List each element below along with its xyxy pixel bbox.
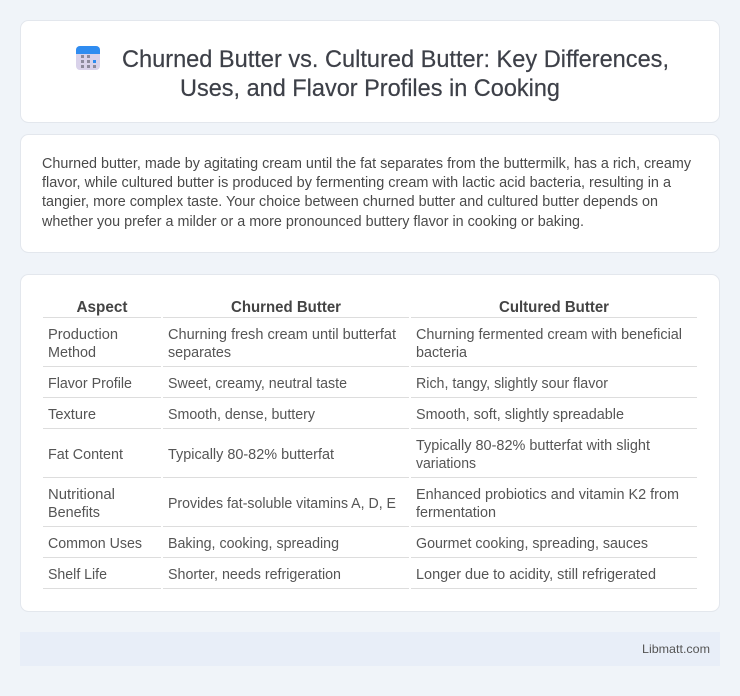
text block: introduction: [41, 156, 692, 230]
title: [122, 46, 669, 102]
row: common uses: Common Uses: [48, 536, 142, 552]
row: nutritional benefits: [48, 487, 679, 521]
row: flavor profile: Rich, tangy, slightly sour flavor: [416, 376, 608, 392]
panel: title header: [20, 20, 720, 122]
row: fat content: Typically 80-82% butterfat with slight: [416, 438, 650, 454]
row: texture: [48, 407, 624, 423]
row: nutritional benefits: Nutritional: [48, 487, 115, 503]
title: Uses, and Flavor Profiles in Cooking: [180, 75, 560, 102]
text block: introduction: tangier, more complex taste. Your choice between churned butter and cultured butter depends on: [42, 194, 658, 210]
table header: [76, 299, 609, 316]
footer: [20, 632, 720, 666]
row: fat content: Fat Content: [48, 447, 123, 463]
row: common uses: Gourmet cooking, spreading, sauces: [416, 536, 648, 552]
row: production method: [48, 327, 682, 361]
row: texture: Smooth, dense, buttery: [168, 407, 316, 423]
row: texture: Smooth, soft, slightly spreadable: [416, 407, 624, 423]
row: fat content: variations: [416, 456, 476, 472]
row: fat content: [48, 438, 650, 472]
row: production method: Method: [48, 345, 96, 361]
row: flavor profile: Flavor Profile: [48, 376, 132, 392]
row: production method: separates: [168, 345, 231, 361]
text block: introduction: flavor, while cultured butter is produced by fermenting cream with lactic acid bacteria, resulting in a: [42, 175, 671, 191]
table header: Churned Butter: [231, 299, 341, 316]
row: fat content: Typically 80-82% butterfat: [168, 447, 334, 463]
row: common uses: Baking, cooking, spreading: [168, 536, 339, 552]
row: shelf life: Shorter, needs refrigeration: [168, 567, 341, 583]
row: shelf life: Longer due to acidity, still refrigerated: [416, 567, 656, 583]
row: texture: Texture: [48, 407, 96, 423]
row: nutritional benefits: fermentation: [416, 505, 496, 521]
panel: introduction: [20, 134, 720, 252]
table header: Cultured Butter: [499, 299, 609, 316]
row: nutritional benefits: Provides fat-soluble vitamins A, D, E: [168, 496, 396, 512]
row: flavor profile: [48, 376, 608, 392]
row: common uses: [48, 536, 648, 552]
panel: comparison table: [20, 274, 720, 612]
row: production method: Churning fermented cream with beneficial: [416, 327, 682, 343]
row: production method: bacteria: [416, 345, 467, 361]
row: shelf life: Shelf Life: [48, 567, 107, 583]
row: shelf life: [48, 567, 656, 583]
footer: Libmatt.com: [642, 642, 710, 656]
icon: calendar: [76, 46, 100, 70]
text block: introduction: Churned butter, made by agitating cream until the fat separates from the buttermilk, has a rich, creamy: [42, 156, 692, 172]
title: Churned Butter vs. Cultured Butter: Key Differences,: [122, 46, 669, 73]
text block: introduction: whether you prefer a milder or a more pronounced buttery flavor in cooking or baking.: [41, 214, 584, 230]
row: nutritional benefits: Enhanced probiotics and vitamin K2 from: [416, 487, 679, 503]
row: flavor profile: Sweet, creamy, neutral taste: [168, 376, 347, 392]
row: production method: Churning fresh cream until butterfat: [168, 327, 396, 343]
row: production method: Production: [48, 327, 118, 343]
table rows: [43, 318, 697, 588]
table header: Aspect: [76, 299, 128, 316]
row: nutritional benefits: Benefits: [48, 505, 100, 521]
